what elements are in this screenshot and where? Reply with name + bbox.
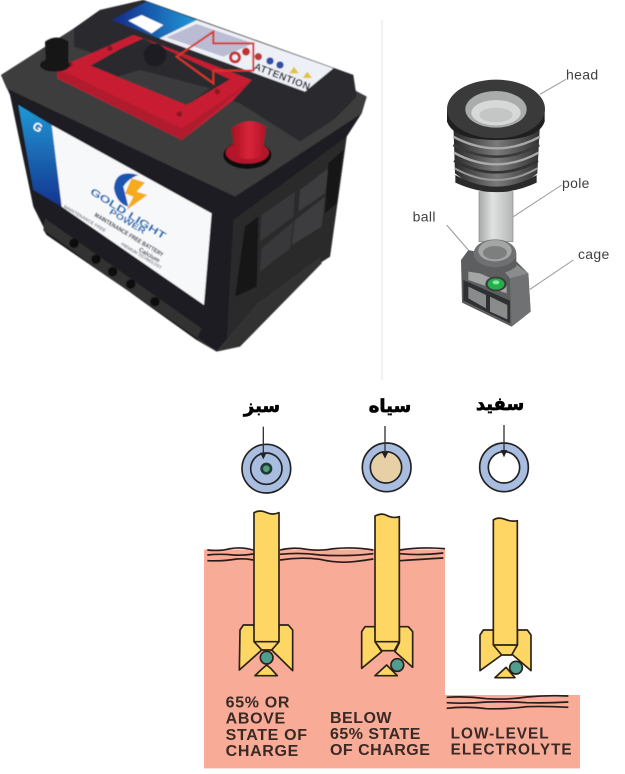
front label blue strip: [18, 105, 62, 207]
premium line: PREMIUM TECHNOLOGY: [120, 242, 163, 270]
raised rear cover: [74, 0, 357, 142]
battery photo: [1, 0, 367, 352]
negative terminal: [40, 37, 70, 72]
electrolyte state diagram: [204, 394, 580, 768]
front lower ribs: [43, 218, 217, 352]
top label blue section: [112, 2, 197, 38]
caption: below 65%: 65% STATE: [330, 726, 421, 743]
positive terminal: [223, 121, 271, 169]
logo: [114, 173, 147, 210]
label: pole: pole: [562, 175, 590, 191]
red pointer arrow outline: [177, 32, 253, 83]
battery body: [1, 0, 367, 352]
cage: [461, 239, 531, 327]
color label: black: سیاه: [369, 396, 411, 417]
warning icons: [229, 48, 312, 78]
top label white section: [159, 20, 333, 93]
label: head: head: [566, 66, 598, 82]
float column 2: [362, 514, 413, 676]
side panel ribs: [217, 137, 347, 352]
strip logo: G: [30, 119, 45, 136]
red handle plate: [57, 35, 252, 140]
caption: 65% or above: 65% OR: [226, 694, 290, 711]
caption: low level: ELECTROLYTE: [451, 741, 573, 758]
caption: 65% or above: ABOVE: [226, 710, 286, 727]
float indicator exploded diagram: [413, 66, 610, 327]
front white label: [52, 125, 212, 305]
ribbed head: [447, 80, 545, 192]
caption: 65% or above: STATE OF: [226, 727, 308, 744]
maintenance free line: MAINTENANCE FREE BATTERY: [93, 213, 164, 259]
label: cage: cage: [578, 246, 610, 262]
caption: low level: LOW-LEVEL: [451, 726, 550, 743]
caption: below 65%: OF CHARGE: [330, 742, 430, 759]
label: ball: ball: [413, 208, 436, 224]
caption: 65% or above: CHARGE: [226, 743, 299, 760]
gauge: tan: [362, 426, 411, 492]
website line: MAINTENANCE FREE: [63, 204, 107, 233]
electrolyte tank high level: [204, 549, 445, 768]
white strip above first wave: [204, 544, 445, 549]
attention text: ATTENTION: [252, 62, 312, 93]
caption: below 65%: BELOW: [330, 710, 392, 727]
low electrolyte surface waves: [447, 696, 568, 709]
float column 3: [480, 518, 531, 678]
leader lines: [447, 79, 573, 289]
divider between photo and float diagram: [381, 20, 383, 380]
electrolyte tank low level: [445, 695, 580, 768]
calcium line: Calcium: [137, 247, 160, 264]
brand subtitle: POWER: [108, 206, 148, 236]
green ball: [485, 277, 507, 291]
float column 1: [239, 511, 293, 676]
top electrolyte surface waves: [207, 548, 445, 562]
color label: green: سبز: [243, 396, 280, 417]
top label barcode patch: [128, 15, 163, 33]
pole: [479, 192, 513, 242]
battery top face: [1, 0, 367, 197]
gauge: green: [242, 427, 291, 493]
color label: white: سفید: [476, 394, 524, 415]
gauge: white: [480, 425, 528, 492]
brand name: GOLD LIGHT: [88, 187, 168, 242]
